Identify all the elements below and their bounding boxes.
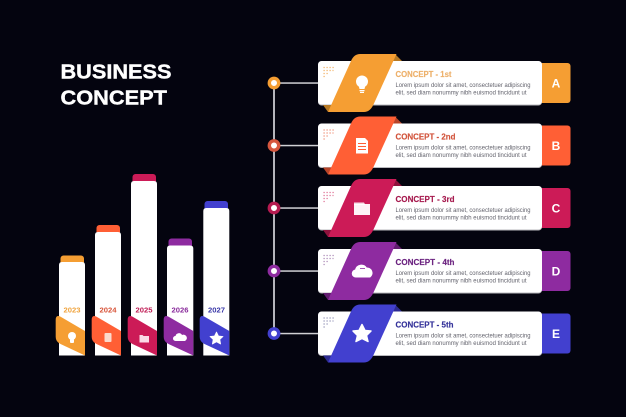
panel: concept 1: A (552, 76, 561, 90)
icon: bulb (68, 332, 76, 343)
icon: folder (354, 202, 370, 215)
panel: concept 2: elit, sed diam nonummy nibh euismod tincidunt ut (396, 153, 527, 159)
icon: document (104, 333, 112, 342)
panel: concept 3: CONCEPT - 3rd (396, 195, 455, 204)
bar: 2023 (56, 256, 85, 356)
icon: cloud (173, 333, 187, 341)
panel: concept 4: CONCEPT - 4th (396, 258, 455, 267)
timeline connector (269, 78, 318, 338)
panel: concept 5: elit, sed diam nonummy nibh euismod tincidunt ut (396, 341, 527, 347)
bar chart (56, 174, 229, 356)
icon: star (353, 324, 371, 342)
panel: concept 1: Lorem ipsum dolor sit amet, consectetuer adipiscing (396, 83, 530, 89)
panel: concept 3: Lorem ipsum dolor sit amet, consectetuer adipiscing (396, 208, 530, 214)
bar: 2025 (128, 174, 157, 356)
tab D (538, 251, 570, 291)
tab B (538, 126, 570, 166)
bar: 2023: 2023 (64, 308, 81, 314)
title: BUSINESS (60, 61, 172, 83)
panel: concept 1: CONCEPT - 1st (396, 70, 452, 79)
tab C (538, 188, 570, 228)
bar: 2026 (164, 238, 193, 356)
panel: concept 1 (318, 54, 570, 112)
tab E (538, 314, 570, 354)
panel: concept 4: Lorem ipsum dolor sit amet, consectetuer adipiscing (396, 271, 530, 277)
icon: folder (140, 335, 149, 342)
panel: concept 5: E (552, 327, 560, 341)
panel: concept 4: elit, sed diam nonummy nibh euismod tincidunt ut (396, 278, 527, 284)
node: A (269, 78, 279, 88)
panel: concept 2: CONCEPT - 2nd (396, 132, 456, 142)
panel: concept 1: elit, sed diam nonummy nibh euismod tincidunt ut (396, 90, 527, 96)
node: D (269, 266, 279, 276)
panel: concept 4: D (552, 264, 561, 278)
bar: 2026: 2026 (172, 308, 189, 314)
icon: bulb (356, 76, 368, 93)
panel: concept 5: Lorem ipsum dolor sit amet, consectetuer adipiscing (396, 334, 530, 340)
panel: concept 3 (318, 179, 570, 237)
node: E (269, 329, 279, 338)
icon: star (210, 332, 223, 344)
title: CONCEPT (60, 87, 167, 109)
panel: concept 3: elit, sed diam nonummy nibh euismod tincidunt ut (396, 216, 527, 222)
panel: concept 2 (318, 116, 570, 174)
bar: 2025: 2025 (136, 308, 153, 314)
icon: document (356, 138, 368, 154)
title (60, 61, 172, 109)
panel: concept 5 (318, 304, 570, 362)
bar: 2024: 2024 (100, 308, 117, 314)
bar: 2024 (92, 225, 121, 356)
panel: concept 2: Lorem ipsum dolor sit amet, consectetuer adipiscing (396, 146, 530, 152)
tab A (538, 63, 570, 103)
bar: 2027 (200, 201, 229, 356)
panel: concept 2: B (552, 139, 561, 153)
panel: concept 5: CONCEPT - 5th (396, 320, 454, 330)
icon: cloud (352, 265, 372, 277)
panel: concept 3: C (552, 202, 561, 216)
node: B (269, 141, 279, 150)
node: C (269, 203, 279, 213)
panel: concept 4 (318, 242, 570, 300)
bar: 2027: 2027 (208, 308, 225, 314)
